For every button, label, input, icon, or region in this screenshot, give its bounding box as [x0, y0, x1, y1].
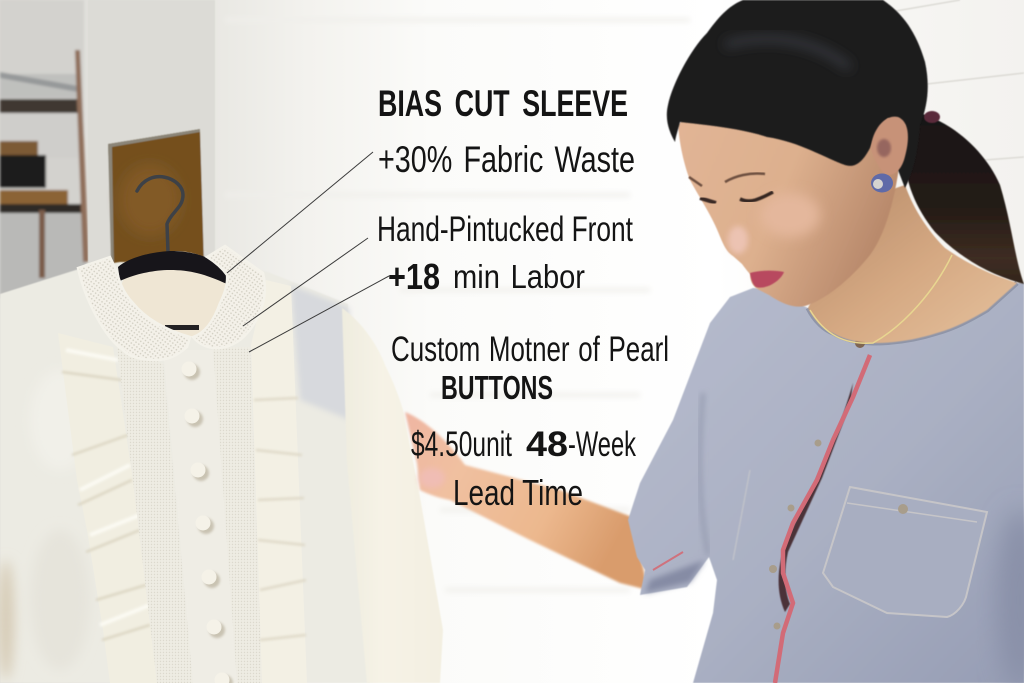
dark placket gap — [779, 383, 853, 612]
chest pocket — [823, 487, 987, 617]
red placket — [775, 355, 870, 683]
text: hand-pintucked front: Hand-Pintucked Front — [377, 210, 633, 249]
callout leader lines — [227, 152, 389, 352]
centre button band — [163, 350, 237, 683]
hair shine — [725, 39, 850, 68]
left pocket outline — [733, 470, 750, 560]
eye right — [740, 192, 773, 201]
cheek warm tone — [760, 193, 820, 237]
hair — [667, 0, 928, 188]
lower right shadow — [996, 510, 1024, 683]
buttons — [182, 362, 233, 683]
scrunchie — [924, 111, 940, 123]
necklace — [810, 255, 952, 343]
brow — [689, 173, 765, 186]
blouse body — [0, 262, 370, 683]
ear — [871, 117, 908, 175]
woman's head and neck — [667, 0, 1024, 343]
earring — [871, 174, 893, 192]
soft folds on body — [0, 370, 90, 680]
text: lead time: Lead Time — [453, 472, 583, 513]
text: week: -Week — [568, 425, 636, 464]
right sleeve — [342, 308, 443, 683]
pink cuff lining — [653, 552, 683, 570]
face — [678, 100, 900, 307]
text: price per unit: $4.50unit — [411, 425, 512, 464]
background: shelving unit at left — [0, 0, 89, 298]
blouse on hanger — [0, 177, 443, 683]
ponytail — [905, 112, 1024, 284]
grey shoulder shadow — [291, 285, 350, 420]
woman's arm and hand — [405, 412, 648, 590]
heading: buttons: BUTTONS — [441, 369, 553, 406]
eye left — [700, 198, 716, 203]
peter pan collar — [78, 246, 265, 360]
text: 48: 48 — [526, 425, 568, 464]
left ruffle — [58, 333, 157, 683]
inside of neck — [120, 251, 232, 339]
sleeve seam and cuff shadows — [700, 393, 708, 555]
left lace strip — [117, 347, 193, 683]
text: plus 18: +18 — [388, 256, 440, 297]
lips — [750, 271, 784, 288]
neckline trim — [808, 283, 1017, 343]
right lace strip — [213, 347, 262, 683]
text: fabric waste: +30% Fabric Waste — [378, 139, 635, 180]
woman's shirt — [628, 283, 1024, 683]
shirt buttons — [769, 338, 908, 630]
hanger — [118, 177, 227, 330]
callout text block — [377, 83, 669, 513]
background: brown door — [88, 0, 215, 290]
text: min labor: min Labor — [453, 258, 585, 295]
right ruffle — [251, 280, 307, 683]
nose highlight — [728, 226, 748, 254]
text: custom mother of pearl: Custom Motner of Pearl — [391, 330, 669, 369]
neck — [808, 185, 1017, 343]
heading: bias cut sleeve: BIAS CUT SLEEVE — [378, 83, 628, 124]
